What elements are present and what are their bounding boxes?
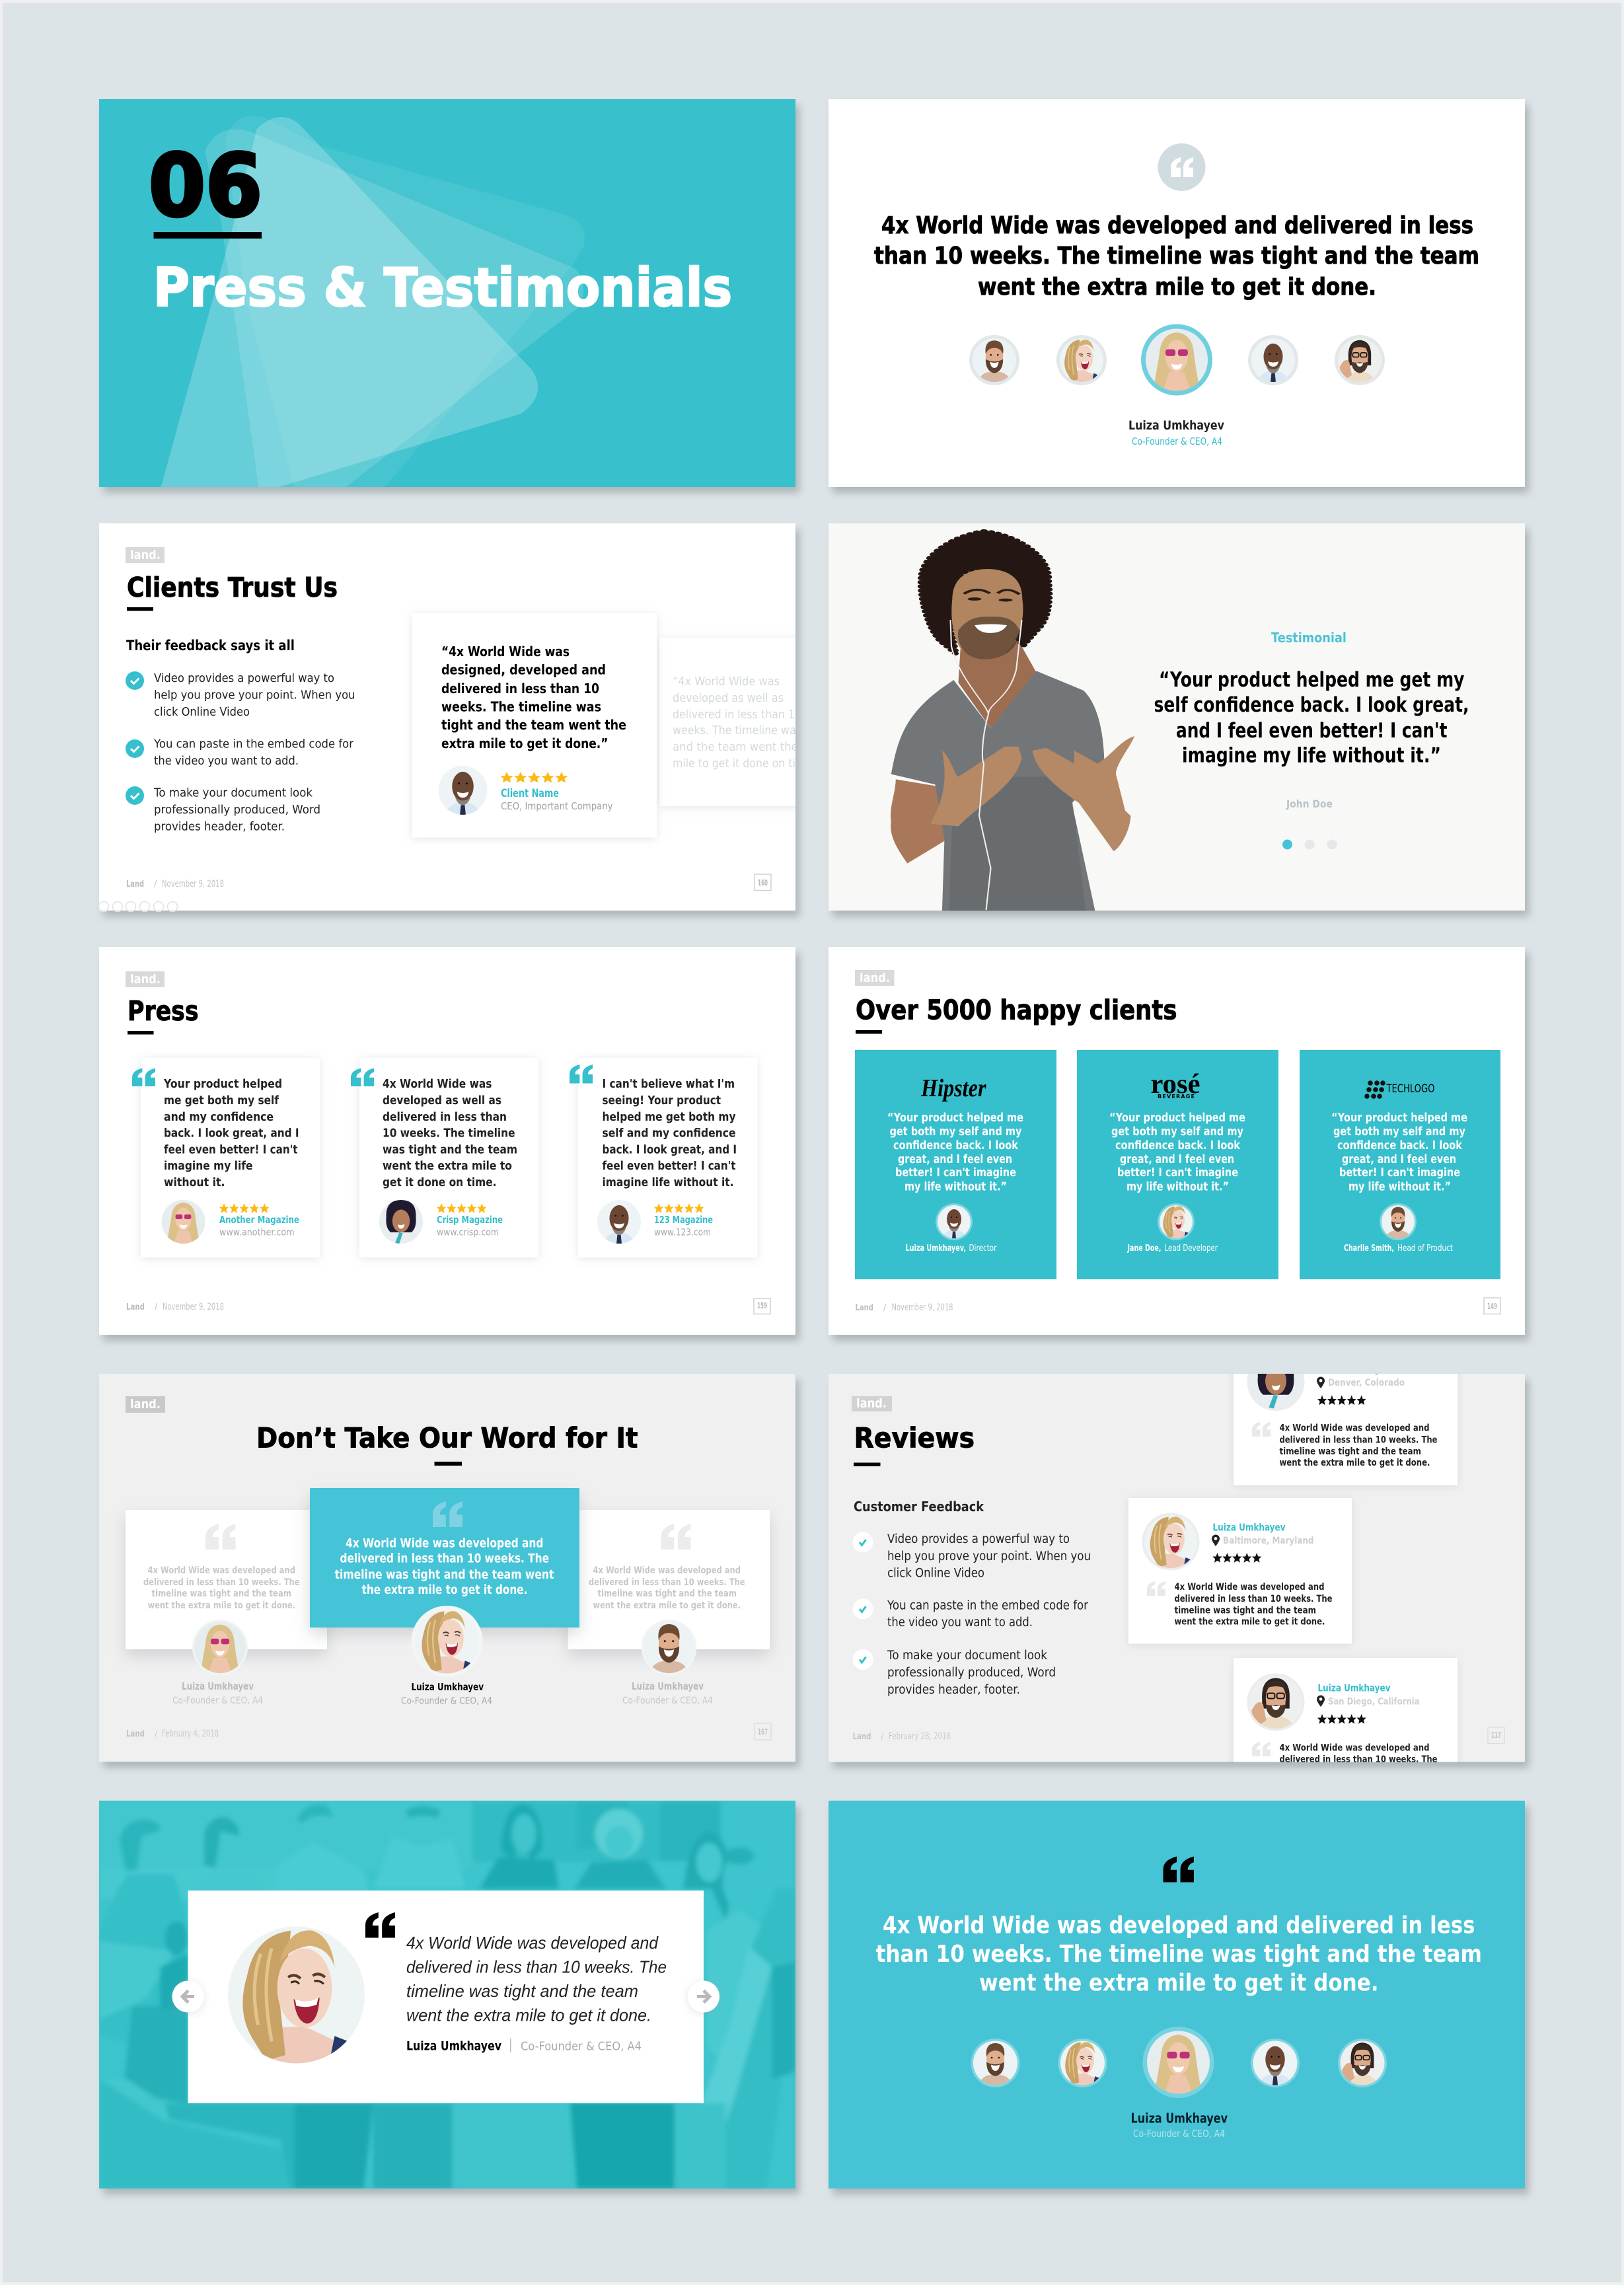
- client card: hipster: [855, 1050, 1056, 1279]
- review card middle: [1128, 1498, 1352, 1644]
- footer: [126, 1729, 219, 1739]
- photo: man with earphones: [891, 531, 1134, 911]
- section number: 06: [149, 135, 262, 236]
- press card 3: [570, 1058, 757, 1257]
- testimonial card: “4x World Wide was: [441, 644, 570, 659]
- review card middle: 4x World Wide was developed and: [1175, 1582, 1324, 1592]
- client card: techlogo: [1300, 1050, 1500, 1279]
- faded back card: weeks. The timeline was: [673, 724, 801, 737]
- review card middle: went the extra mile to get it done.: [1175, 1616, 1325, 1627]
- client card: rose: my life without it.”: [1126, 1180, 1229, 1193]
- press card 1: without it.: [164, 1176, 225, 1189]
- press card 1: imagine my life: [164, 1159, 252, 1173]
- page number: [754, 1298, 770, 1314]
- press card 2: www.crisp.com: [437, 1228, 499, 1238]
- client card: rose: “Your product helped me: [1109, 1111, 1245, 1125]
- attribution: Co-Founder & CEO, A4: [1132, 435, 1222, 447]
- testimonial card center: Co-Founder & CEO, A4: [401, 1696, 492, 1706]
- footer: /: [883, 1303, 887, 1313]
- footer: November 9, 2018: [162, 879, 224, 889]
- client card: techlogo: TECHLOGO: [1386, 1082, 1435, 1096]
- footer: /: [155, 1302, 158, 1312]
- attribution: Luiza Umkhayev: [1131, 2111, 1228, 2126]
- press card 2: 10 weeks. The timeline: [383, 1126, 515, 1141]
- footer: [126, 879, 224, 889]
- client card: hipster: confidence back. I look: [893, 1139, 1018, 1152]
- italic quote: 4x World Wide was developed and: [406, 1933, 659, 1953]
- client card: techlogo: get both my self and my: [1333, 1125, 1465, 1139]
- testimonial card right: delivered in less than 10 weeks. The: [589, 1577, 745, 1588]
- footer: [852, 1731, 951, 1742]
- panel: clients trust us: [99, 523, 858, 912]
- arrow: next: [688, 1981, 720, 2013]
- testimonial card: CEO, Important Company: [501, 800, 613, 812]
- icon: quote badge: [1158, 143, 1205, 191]
- press card 2: Crisp Magazine: [437, 1214, 503, 1226]
- page number: [755, 1723, 771, 1740]
- press card 3: imagine life without it.: [603, 1176, 733, 1189]
- testimonial card right: [568, 1510, 770, 1706]
- review card top: timeline was tight and the team: [1279, 1446, 1421, 1457]
- press card 3: seeing! Your product: [603, 1094, 721, 1107]
- testimonial card center: [310, 1488, 579, 1706]
- quote text: [874, 212, 1479, 301]
- testimonial card right: timeline was tight and the team: [597, 1589, 737, 1599]
- press card 1: www.another.com: [219, 1228, 295, 1238]
- page number: [755, 874, 771, 891]
- review card top: went the extra mile to get it done.: [1279, 1458, 1430, 1468]
- checklist: [852, 1532, 1091, 1697]
- testimonial card left: went the extra mile to get it done.: [148, 1600, 295, 1611]
- panel: photo background testimonial: [99, 1801, 795, 2189]
- review card bottom: [1234, 1658, 1458, 1803]
- attribution: Luiza Umkhayev: [406, 2039, 501, 2054]
- review card bottom: Luiza Umkhayev: [1317, 1682, 1390, 1694]
- footer: [126, 1302, 224, 1312]
- footer: /: [155, 1729, 158, 1739]
- testimonial card center: delivered in less than 10 weeks. The: [340, 1552, 549, 1566]
- quote card: [188, 1891, 704, 2103]
- faded back card: mile to get it done on time.: [673, 757, 815, 770]
- press card 2: get it done on time.: [383, 1176, 497, 1189]
- panel: press: [99, 947, 795, 1335]
- checklist: To make your document look: [887, 1649, 1047, 1663]
- press card 2: [351, 1058, 538, 1257]
- page number: 159: [757, 1301, 767, 1310]
- logo badge: land.: [130, 1397, 161, 1411]
- checklist: [126, 671, 355, 834]
- footer: February 4, 2018: [162, 1729, 219, 1739]
- checklist: provides header, footer.: [887, 1683, 1020, 1697]
- testimonial card right: went the extra mile to get it done.: [593, 1600, 741, 1611]
- checklist: click Online Video: [154, 705, 250, 719]
- client card: rose: [1077, 1050, 1278, 1279]
- testimonial card: designed, developed and: [441, 662, 606, 678]
- logo badge: land.: [856, 1396, 887, 1411]
- testimonial card left: delivered in less than 10 weeks. The: [143, 1577, 300, 1588]
- client card: techlogo: “Your product helped me: [1331, 1111, 1467, 1125]
- client card: rose: Lead Developer: [1164, 1243, 1218, 1254]
- quote text: 4x World Wide was developed and delivered in less: [883, 1912, 1475, 1939]
- testimonial card center: 4x World Wide was developed and: [346, 1537, 543, 1550]
- attribution: [406, 2039, 642, 2054]
- checklist: To make your document look: [153, 786, 313, 800]
- review card top: [1234, 1340, 1458, 1485]
- press card 2: 4x World Wide was: [383, 1077, 492, 1091]
- testimonial card right: 4x World Wide was developed and: [593, 1565, 741, 1576]
- panel: reviews: [829, 1340, 1525, 1803]
- testimonial card center: the extra mile to get it done.: [362, 1583, 527, 1597]
- faded back card: “4x World Wide was: [673, 675, 780, 689]
- footer: Land: [852, 1732, 871, 1742]
- attribution: [1128, 418, 1224, 447]
- italic quote: delivered in less than 10 weeks. The: [406, 1957, 667, 1977]
- attribution: Co-Founder & CEO, A4: [521, 2039, 642, 2054]
- client card: techlogo: Head of Product: [1397, 1243, 1453, 1254]
- checklist: professionally produced, Word: [887, 1666, 1056, 1680]
- page number: [1488, 1727, 1504, 1743]
- avatar row: [971, 2027, 1387, 2098]
- review card middle: timeline was tight and the team: [1175, 1606, 1316, 1616]
- press card 2: developed as well as: [383, 1094, 501, 1107]
- press card 3: www.123.com: [654, 1228, 711, 1238]
- press card 1: feel even better! I can't: [164, 1143, 298, 1156]
- quote: imagine my life without it.”: [1182, 744, 1441, 768]
- press card 1: Your product helped: [163, 1077, 282, 1091]
- press card 3: I can't believe what I'm: [603, 1077, 735, 1091]
- decorative rounded triangles: [161, 116, 585, 489]
- icon: quote mark: [365, 1912, 395, 1937]
- client card: hipster: Luiza Umkhayev,: [905, 1243, 966, 1254]
- client card: hipster: get both my self and my: [889, 1125, 1022, 1139]
- number underline: [153, 232, 262, 239]
- quote text: 4x World Wide was developed and delivered in less: [881, 212, 1473, 239]
- panel: teal quote with avatars: [829, 1801, 1525, 2189]
- panel: quote with avatars: [829, 99, 1525, 487]
- logo badge: land.: [130, 548, 161, 562]
- review card middle: delivered in less than 10 weeks. The: [1175, 1594, 1333, 1604]
- press card 2: was tight and the team: [383, 1143, 517, 1156]
- client card: rose: confidence back. I look: [1115, 1139, 1240, 1152]
- avatar row: [969, 324, 1385, 395]
- client card: rose: BEVERAGE: [1158, 1094, 1195, 1100]
- italic quote: went the extra mile to get it done.: [406, 2005, 651, 2025]
- review card top: 4x World Wide was developed and: [1279, 1423, 1430, 1434]
- testimonial card left: Luiza Umkhayev: [182, 1680, 254, 1692]
- quote: “Your product helped me get my: [1159, 668, 1464, 692]
- client card: techlogo: confidence back. I look: [1337, 1139, 1462, 1152]
- italic quote: timeline was tight and the team: [406, 1981, 638, 2001]
- page number: 160: [758, 878, 768, 887]
- testimonial card: [412, 613, 657, 838]
- quote: [1154, 668, 1469, 768]
- quote text: went the extra mile to get it done.: [979, 1969, 1378, 1997]
- photo: team meeting duotone: [100, 1801, 795, 2189]
- checklist: the video you want to add.: [154, 754, 299, 768]
- heading: Don’t Take Our Word for It: [256, 1422, 638, 1454]
- testimonial card left: Co-Founder & CEO, A4: [172, 1696, 263, 1706]
- press card 2: went the extra mile to: [383, 1159, 512, 1173]
- testimonial card right: Co-Founder & CEO, A4: [622, 1696, 713, 1706]
- review card bottom: 4x World Wide was developed and: [1279, 1743, 1430, 1754]
- quote text: [876, 1912, 1482, 1997]
- client card: hipster: Director: [969, 1243, 997, 1254]
- subheading: Customer Feedback: [854, 1499, 984, 1515]
- checklist: Video provides a powerful way to: [154, 671, 334, 685]
- footer: Land: [855, 1303, 873, 1313]
- footer: November 9, 2018: [163, 1302, 224, 1312]
- testimonial card: Client Name: [501, 787, 559, 800]
- client card: rose: get both my self and my: [1111, 1125, 1243, 1139]
- heading: Clients Trust Us: [127, 572, 338, 603]
- panel: section cover: [99, 99, 795, 489]
- logo badge: land.: [860, 971, 890, 985]
- review card top: delivered in less than 10 weeks. The: [1279, 1435, 1438, 1446]
- panel: don't take our word for it: [99, 1374, 795, 1762]
- quote text: than 10 weeks. The timeline was tight and the team: [874, 243, 1479, 270]
- press card 2: delivered in less than: [383, 1110, 507, 1124]
- checklist: professionally produced, Word: [154, 803, 320, 817]
- heading: Reviews: [854, 1422, 975, 1454]
- footer: November 9, 2018: [892, 1302, 953, 1313]
- page number: 117: [1491, 1731, 1501, 1740]
- client card: techlogo: great, and I feel even: [1342, 1153, 1456, 1166]
- checklist: click Online Video: [887, 1566, 984, 1581]
- press card 1: and my confidence: [164, 1110, 274, 1124]
- panel: over 5000 happy clients: [829, 947, 1525, 1335]
- pagination dots: [1282, 839, 1337, 850]
- client card: hipster: great, and I feel even: [898, 1153, 1012, 1166]
- panel: testimonial with portrait: [829, 523, 1525, 911]
- review card top: Denver, Colorado: [1328, 1378, 1405, 1388]
- client card: hipster: my life without it.”: [904, 1180, 1007, 1193]
- quote text: than 10 weeks. The timeline was tight and the team: [876, 1941, 1482, 1968]
- footer: /: [881, 1732, 884, 1742]
- quote: and I feel even better! I can't: [1176, 719, 1448, 743]
- client card: hipster: “Your product helped me: [887, 1111, 1023, 1125]
- testimonial card left: [126, 1510, 327, 1706]
- client card: hipster: Hipster: [920, 1074, 987, 1102]
- heading: Over 5000 happy clients: [856, 994, 1177, 1026]
- client card: techlogo: Charlie Smith,: [1344, 1243, 1394, 1254]
- review card top: Luiza Umkhayev: [1317, 1364, 1390, 1376]
- quote: self confidence back. I look great,: [1154, 693, 1469, 717]
- portrait: [228, 1927, 365, 2063]
- client card: rose: great, and I feel even: [1120, 1153, 1234, 1166]
- review card bottom: delivered in less than 10 weeks. The: [1279, 1754, 1438, 1765]
- attribution: [1131, 2111, 1228, 2140]
- testimonial card left: timeline was tight and the team: [152, 1589, 291, 1599]
- press card 1: Another Magazine: [219, 1214, 299, 1226]
- section title: Press & Testimonials: [153, 257, 732, 318]
- footer: /: [154, 880, 157, 889]
- testimonial card: tight and the team went the: [441, 717, 626, 733]
- testimonial card left: 4x World Wide was developed and: [148, 1565, 295, 1576]
- checklist: the video you want to add.: [887, 1616, 1033, 1629]
- footer: Land: [126, 1729, 145, 1739]
- review card bottom: San Diego, California: [1328, 1697, 1419, 1707]
- client card: hipster: better! I can't imagine: [895, 1166, 1016, 1180]
- testimonial card: weeks. The timeline was: [441, 699, 601, 715]
- client card: rose: rosé: [1151, 1069, 1200, 1100]
- slideshow controls: [99, 901, 177, 912]
- press card 3: 123 Magazine: [654, 1214, 713, 1226]
- press card 3: feel even better! I can't: [603, 1159, 736, 1173]
- client card: rose: better! I can't imagine: [1117, 1166, 1238, 1180]
- heading: Press: [128, 995, 198, 1027]
- client card: techlogo: better! I can't imagine: [1339, 1166, 1460, 1180]
- attribution: Co-Founder & CEO, A4: [1133, 2128, 1225, 2140]
- review card middle: Baltimore, Maryland: [1223, 1536, 1313, 1546]
- footer: February 28, 2018: [889, 1731, 951, 1742]
- client card: techlogo: my life without it.”: [1348, 1180, 1451, 1193]
- press card 1: me get both my self: [164, 1094, 279, 1107]
- author: John Doe: [1286, 798, 1333, 810]
- testimonial card center: Luiza Umkhayev: [411, 1681, 484, 1693]
- client card: rose: Jane Doe,: [1127, 1243, 1162, 1254]
- eyebrow label: Testimonial: [1271, 630, 1347, 646]
- press card 3: self and my confidence: [603, 1126, 736, 1141]
- testimonial card center: timeline was tight and the team went: [334, 1568, 554, 1582]
- checklist: help you prove your point. When you: [887, 1550, 1091, 1563]
- review cards: [1128, 1340, 1458, 1803]
- checklist: You can paste in the embed code for: [887, 1599, 1088, 1612]
- checklist: help you prove your point. When you: [154, 689, 355, 702]
- testimonial card: delivered in less than 10: [441, 681, 599, 696]
- checklist: provides header, footer.: [154, 819, 285, 834]
- press card 3: helped me get both my: [603, 1110, 736, 1124]
- faded back card: delivered in less than 10: [673, 708, 801, 722]
- testimonial card: extra mile to get it done.”: [441, 735, 608, 751]
- page number: 149: [1487, 1302, 1497, 1311]
- faded back card: and the team went the extra: [673, 740, 830, 754]
- logo badge: land.: [130, 972, 161, 987]
- attribution: Luiza Umkhayev: [1128, 418, 1224, 433]
- press card 3: back. I look great, and I: [603, 1143, 737, 1156]
- faded back card: developed as well as: [673, 691, 784, 705]
- subheading: Their feedback says it all: [126, 638, 295, 654]
- checklist: Video provides a powerful way to: [887, 1532, 1070, 1546]
- review card middle: Luiza Umkhayev: [1213, 1521, 1286, 1533]
- page number: 167: [758, 1727, 768, 1737]
- page number: [1484, 1298, 1500, 1314]
- arrow: previous: [172, 1981, 203, 2013]
- icon: quote mark: [1163, 1857, 1194, 1882]
- italic quote: [406, 1933, 667, 2025]
- quote text: went the extra mile to get it done.: [978, 274, 1376, 301]
- footer: [855, 1302, 953, 1313]
- footer: Land: [126, 1302, 145, 1312]
- checklist: You can paste in the embed code for: [153, 737, 354, 751]
- testimonial card right: Luiza Umkhayev: [632, 1680, 704, 1692]
- faded back card: [659, 638, 858, 806]
- press card 1: [132, 1058, 320, 1257]
- press card 1: back. I look great, and I: [164, 1126, 299, 1141]
- footer: Land: [126, 880, 144, 889]
